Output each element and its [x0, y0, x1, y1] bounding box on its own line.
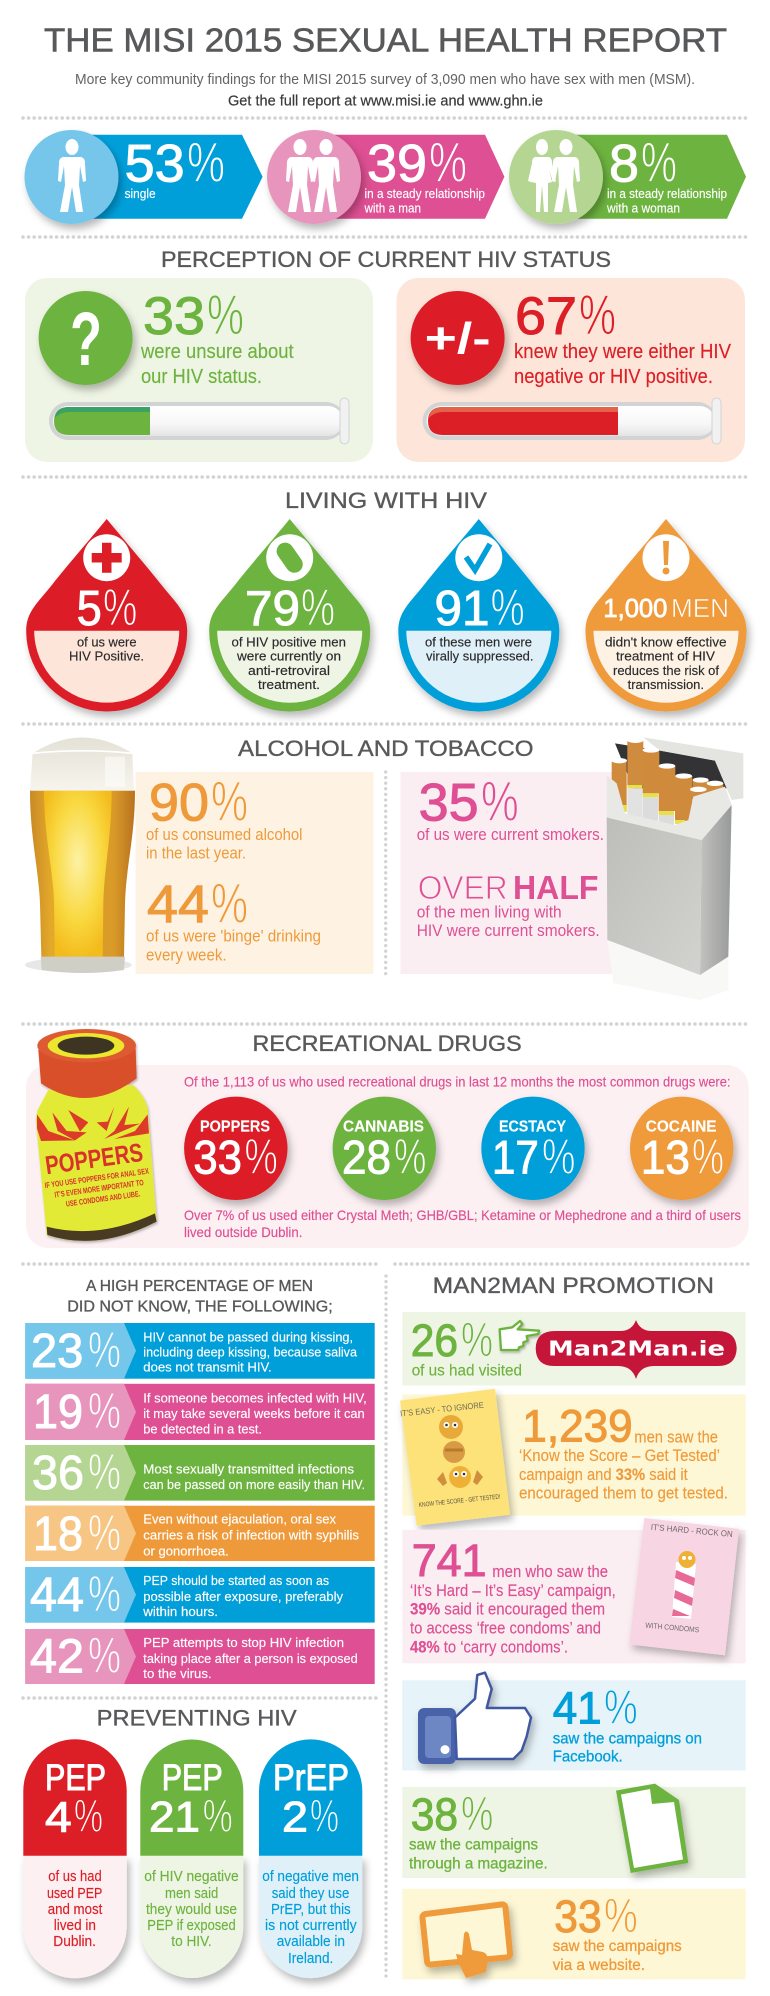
drop: 79% on treatment: % [301, 579, 335, 637]
icon: beer glass [25, 737, 135, 973]
panel: relationship with a woman: % [641, 131, 677, 195]
panel: it's hard campaign: to access ‘free condoms’ and [410, 1619, 601, 1638]
panel: tobacco: of the men living with [417, 904, 562, 922]
panel: relationship single: 53 [125, 135, 185, 194]
poster: it's hard rock on: WITH CONDOMS [645, 1621, 700, 1634]
bar: 42% [25, 1626, 375, 1684]
panel: facebook: Facebook. [553, 1748, 623, 1765]
icon: question mark: ? [70, 297, 102, 382]
circle: poppers: 33 [193, 1130, 242, 1183]
panel: tobacco: HIV were current smokers. [417, 922, 600, 940]
bar: 18%: % [88, 1504, 121, 1561]
pill: prep 2%: Ireland. [288, 1951, 333, 1967]
icon: poppers bottle [36, 1029, 157, 1241]
logo: man2man.ie: Man2Man.ie [548, 1337, 725, 1361]
panel: visited man2man: of us had visited [412, 1363, 522, 1380]
icon: tablet with hand [422, 1904, 510, 1978]
icon: question mark [39, 291, 133, 385]
panel: unsure status: were unsure about [140, 341, 294, 363]
pill: pep 4%: lived in [54, 1918, 96, 1934]
pill: pep 21% [140, 1740, 243, 1978]
pill: prep 2%: is not currently [265, 1918, 357, 1934]
panel: know the score [400, 1389, 746, 1526]
panel: relationship with a woman [509, 130, 746, 224]
panel: alcohol: in the last year. [146, 845, 246, 863]
panel: facebook: saw the campaigns on [553, 1730, 702, 1748]
pill: pep 21%: of HIV negative [144, 1869, 239, 1885]
drop: 91% suppressed: % [491, 579, 525, 637]
bar: 19%: % [88, 1382, 121, 1439]
pill: pep 21%: to HIV. [171, 1934, 212, 1950]
bar: 19%: it may take several weeks before it can [143, 1406, 365, 1421]
pill: pep 4%: 4 [45, 1793, 72, 1841]
intro text: Get the full report at www.misi.ie and www.ghn.ie [228, 92, 543, 110]
intro text: More key community findings for the MISI 2015 survey of 3,090 men who have sex with men (MSM). [75, 71, 695, 88]
panel: visited man2man: % [461, 1314, 493, 1367]
pill: prep 2%: PrEP [273, 1757, 349, 1798]
title: THE MISI 2015 SEXUAL HEALTH REPORT [44, 22, 727, 58]
drop: 1,000 men: treatment of HIV [616, 649, 715, 664]
bar: 42%: 42 [30, 1630, 84, 1684]
poster: it's easy to ignore [400, 1389, 510, 1526]
panel: recreational drugs: lived outside Dublin. [184, 1224, 302, 1240]
panel: facebook [402, 1673, 746, 1770]
circle: cocaine: % [692, 1128, 724, 1184]
panel: knew status [396, 278, 745, 462]
heading: did not know [67, 1278, 333, 1316]
icon: pill [266, 534, 313, 581]
panel: alcohol: 44 [147, 876, 209, 935]
panel: relationship with a man: in a steady relationship [364, 186, 485, 201]
heading: man2man promotion: MAN2MAN PROMOTION [433, 1273, 714, 1298]
circle: cannabis [333, 1097, 436, 1200]
drop: 1,000 men: reduces the risk of [613, 663, 719, 678]
panel: knew status: knew they were either HIV [514, 341, 732, 363]
panel: alcohol [136, 770, 374, 974]
panel: recreational drugs [26, 1065, 749, 1248]
intro text [75, 71, 695, 110]
icon: poppers bottle: IT'S EVEN MORE IMPORTANT TO [54, 1178, 144, 1199]
bar: 44%: within hours. [142, 1604, 218, 1619]
panel: magazine: % [461, 1788, 493, 1841]
panel: website: via a website. [553, 1957, 645, 1974]
bar: 42%: % [88, 1626, 121, 1684]
pill: pep 21%: 21 [149, 1793, 200, 1841]
panel: website: % [604, 1890, 638, 1943]
panel: website: 33 [554, 1891, 602, 1942]
panel: recreational drugs: Of the 1,113 of us who used recreational drugs in last 12 months the most common drugs were: [184, 1074, 730, 1090]
icon: poppers bottle: IF YOU USE POPPERS FOR ANAL SEX [44, 1166, 150, 1190]
bar: 42%: to the virus. [143, 1666, 212, 1681]
drop: 79% on treatment: were currently on [236, 649, 341, 664]
circle: ecstacy [481, 1097, 585, 1200]
drop: 79% on treatment: treatment. [258, 677, 320, 692]
bar: 23%: 23 [31, 1325, 83, 1378]
poster: it's hard rock on [629, 1518, 739, 1655]
panel: know the score: men saw the [634, 1428, 718, 1446]
pill: pep 21%: men said [165, 1886, 218, 1902]
panel: relationship with a woman: 8 [609, 135, 639, 194]
panel: relationship with a woman: with a woman [606, 201, 680, 216]
bar: 18%: Even without ejaculation, oral sex [143, 1512, 336, 1527]
icon: woman and man [509, 130, 603, 224]
pill: pep 21%: they would use [146, 1902, 237, 1918]
icon: plus minus: +/- [425, 314, 491, 363]
panel: tobacco: 35 [419, 774, 479, 833]
drop: 5% hiv positive: % [103, 579, 137, 637]
pill: pep 4%: PEP [45, 1757, 106, 1798]
drop: 79% on treatment: anti-retroviral [248, 663, 330, 678]
pill: pep 4%: % [74, 1789, 103, 1841]
drop: 1,000 men: MEN [671, 593, 729, 623]
panel: knew status: % [579, 283, 616, 347]
panel: recreational drugs: Over 7% of us used either Crystal Meth; GHB/GBL; Ketamine or Mephedrone and a third of users [184, 1207, 741, 1223]
bar: 23%: does not transmit HIV. [143, 1360, 272, 1374]
heading: recreational drugs: RECREATIONAL DRUGS [252, 1031, 522, 1056]
bar: 36%: % [88, 1443, 121, 1500]
panel: visited man2man [402, 1312, 746, 1386]
panel: relationship with a man: % [429, 131, 467, 195]
panel: alcohol: every week. [146, 947, 227, 965]
bar: 19%: be detected in a test. [143, 1422, 262, 1437]
drop: 79% on treatment [209, 519, 370, 712]
panel: unsure status: 33 [143, 287, 205, 346]
circle: cocaine: 13 [641, 1130, 690, 1183]
pill: pep 4%: used PEP [47, 1886, 102, 1902]
bar: 18%: 18 [33, 1508, 83, 1561]
circle: cannabis: % [394, 1128, 426, 1184]
circle: cannabis: CANNABIS [343, 1119, 424, 1136]
panel: tobacco: OVER [418, 869, 508, 906]
panel: know the score: campaign and 33% said it [519, 1465, 688, 1484]
bar: 19%: If someone becomes infected with HIV, [143, 1390, 367, 1406]
bar: 19% [25, 1382, 375, 1440]
panel: it's hard campaign: men who saw the [492, 1562, 608, 1581]
drop: 1,000 men: transmission. [628, 677, 704, 692]
pill: pep 21%: % [203, 1789, 233, 1841]
panel: unsure status [25, 278, 373, 462]
panel: tobacco: of us were current smokers. [417, 826, 604, 844]
panel: knew status: negative or HIV positive. [514, 366, 713, 388]
bar: 44%: PEP should be started as soon as [143, 1573, 329, 1588]
panel: tobacco: % [481, 770, 519, 834]
pill: prep 2%: said they use [272, 1886, 349, 1902]
drop: 5% hiv positive: of us were [77, 635, 136, 650]
drop: 1,000 men: didn't know effective [605, 635, 727, 650]
drop: 5% hiv positive [26, 519, 187, 712]
panel: facebook: % [604, 1682, 638, 1735]
panel: it's hard campaign: 741 [412, 1535, 487, 1586]
poster: it's hard rock on: IT'S HARD - ROCK ON [651, 1522, 733, 1539]
circle: ecstacy: 17 [492, 1130, 539, 1183]
bar: 23%: % [88, 1321, 121, 1378]
panel: it's hard campaign: 39% said it encouraged them [410, 1600, 605, 1619]
icon: single man [24, 130, 118, 224]
drop: 91% suppressed: 91 [434, 582, 490, 636]
icon: exclamation [642, 534, 690, 581]
drop: 91% suppressed [398, 519, 559, 712]
panel: tobacco: HALF [513, 869, 598, 906]
heading: did not know: DID NOT KNOW, THE FOLLOWING; [67, 1299, 333, 1316]
panel: alcohol: 90 [149, 774, 209, 833]
pill: prep 2%: PrEP, but this [271, 1902, 351, 1918]
bar: 18% [25, 1504, 375, 1561]
bar: 44% [25, 1565, 375, 1623]
panel: relationship single: % [187, 131, 225, 195]
icon: thumbs up [418, 1673, 531, 1764]
drop: 1,000 men: 1,000 [603, 593, 667, 623]
panel: knew status: 67 [515, 287, 577, 346]
panel: know the score: encouraged them to get tested. [519, 1484, 728, 1503]
heading: preventing hiv: PREVENTING HIV [97, 1705, 297, 1730]
icon: cross [83, 534, 130, 581]
panel: facebook: 41 [553, 1683, 602, 1734]
bar: 19%: 19 [33, 1386, 83, 1439]
panel: visited man2man: 26 [411, 1315, 458, 1366]
circle: cannabis: 28 [342, 1130, 391, 1183]
panel: relationship single: single [125, 186, 156, 201]
panel: relationship with a man [267, 130, 504, 224]
bar: 36%: 36 [32, 1447, 84, 1500]
bar: 44%: % [88, 1565, 121, 1622]
circle: cocaine: COCAINE [646, 1119, 717, 1136]
panel: know the score: ‘Know the Score – Get Tested’ [519, 1446, 720, 1465]
panel: tobacco [400, 770, 616, 974]
panel: unsure status: our HIV status. [141, 366, 262, 388]
panel: relationship single [24, 130, 263, 224]
heading: perception: PERCEPTION OF CURRENT HIV STATUS [161, 247, 611, 272]
bar: 23%: HIV cannot be passed during kissing, [143, 1330, 353, 1345]
bar: 36% [25, 1443, 375, 1501]
icon: check [455, 534, 502, 581]
drop: 91% suppressed: virally suppressed. [426, 649, 534, 664]
panel: alcohol: % [211, 872, 248, 936]
poster: it's easy to ignore: KNOW THE SCORE - GET TESTED! [419, 1493, 501, 1509]
circle: poppers: % [244, 1128, 278, 1184]
pill: pep 4% [23, 1739, 127, 1978]
pill: pep 4%: of us had [48, 1869, 102, 1885]
heading: did not know: A HIGH PERCENTAGE OF MEN [86, 1278, 313, 1295]
icon: poppers bottle: USE CONDOMS AND LUBE. [65, 1189, 141, 1209]
icon: poppers bottle: POPPERS [43, 1137, 145, 1180]
panel: magazine: 38 [411, 1789, 458, 1840]
bar: 42%: PEP attempts to stop HIV infection [143, 1635, 344, 1650]
bar: 44%: 44 [30, 1569, 84, 1622]
panel: relationship with a woman: in a steady relationship [607, 186, 727, 201]
bar: 44%: possible after exposure, preferably [143, 1589, 343, 1604]
icon: plus minus [411, 291, 505, 385]
drop: 91% suppressed: of these men were [425, 635, 532, 650]
bar: 18%: or gonorrhoea. [143, 1544, 229, 1558]
panel: relationship with a man: 39 [367, 135, 427, 194]
panel: relationship with a man: with a man [364, 201, 421, 216]
bar: 18%: carries a risk of infection with syphilis [143, 1528, 359, 1543]
pill: prep 2%: % [310, 1789, 339, 1841]
icon: magazine page [616, 1784, 688, 1873]
poster: it's easy to ignore: IT'S EASY - TO IGNORE [400, 1400, 484, 1418]
panel: it's hard campaign: ‘It’s Hard – It’s Easy’ campaign, [410, 1581, 616, 1600]
drop: 79% on treatment: 79 [245, 582, 300, 636]
drop: 1,000 men [586, 519, 746, 712]
circle: cocaine [630, 1097, 733, 1200]
icon: two men [267, 130, 361, 224]
panel: alcohol: of us were 'binge' drinking [146, 928, 321, 946]
panel: magazine [402, 1784, 746, 1878]
drop: 79% on treatment: of HIV positive men [232, 635, 346, 650]
pill: prep 2%: of negative men [262, 1869, 359, 1885]
bar: 36%: Most sexually transmitted infections [143, 1462, 355, 1476]
panel: alcohol: % [211, 770, 248, 834]
pill: prep 2% [259, 1739, 362, 1978]
pill: pep 21%: PEP [162, 1757, 223, 1798]
heading: alcohol and tobacco: ALCOHOL AND TOBACCO [238, 736, 534, 761]
drop: 5% hiv positive: 5 [77, 582, 102, 636]
bar: 23%: including deep kissing, because saliva [143, 1344, 358, 1360]
panel: unsure status: % [207, 283, 244, 347]
pill: prep 2%: 2 [282, 1793, 308, 1841]
test tube gauge 33% [49, 398, 349, 444]
panel: website [402, 1889, 746, 1979]
bar: 42%: taking place after a person is exposed [143, 1651, 358, 1666]
panel: it's hard campaign [402, 1518, 746, 1663]
pill: pep 4%: Dublin. [53, 1934, 96, 1950]
pill: pep 4%: and most [48, 1902, 102, 1918]
icon: cigarette pack [607, 737, 743, 1000]
pill: pep 21%: PEP if exposed [147, 1918, 236, 1934]
circle: poppers [184, 1097, 288, 1200]
panel: magazine: through a magazine. [409, 1856, 548, 1872]
panel: magazine: saw the campaigns [409, 1837, 538, 1854]
panel: know the score: 1,239 [522, 1401, 633, 1452]
panel: it's hard campaign: 48% to ‘carry condoms’. [410, 1638, 568, 1656]
circle: ecstacy: ECSTACY [499, 1119, 566, 1136]
circle: poppers: POPPERS [200, 1119, 270, 1136]
heading: living with hiv: LIVING WITH HIV [285, 488, 487, 513]
drop: 5% hiv positive: HIV Positive. [69, 649, 144, 664]
pill: prep 2%: available in [277, 1934, 345, 1950]
bar: 36%: can be passed on more easily than HIV. [143, 1477, 365, 1492]
bar: 23% [25, 1321, 375, 1379]
panel: website: saw the campaigns [553, 1938, 682, 1955]
icon: pointing hand [500, 1321, 539, 1350]
logo: man2man.ie [536, 1320, 737, 1379]
test tube gauge 67% [423, 398, 721, 444]
panel: alcohol: of us consumed alcohol [146, 826, 302, 844]
circle: ecstacy: % [542, 1128, 575, 1184]
